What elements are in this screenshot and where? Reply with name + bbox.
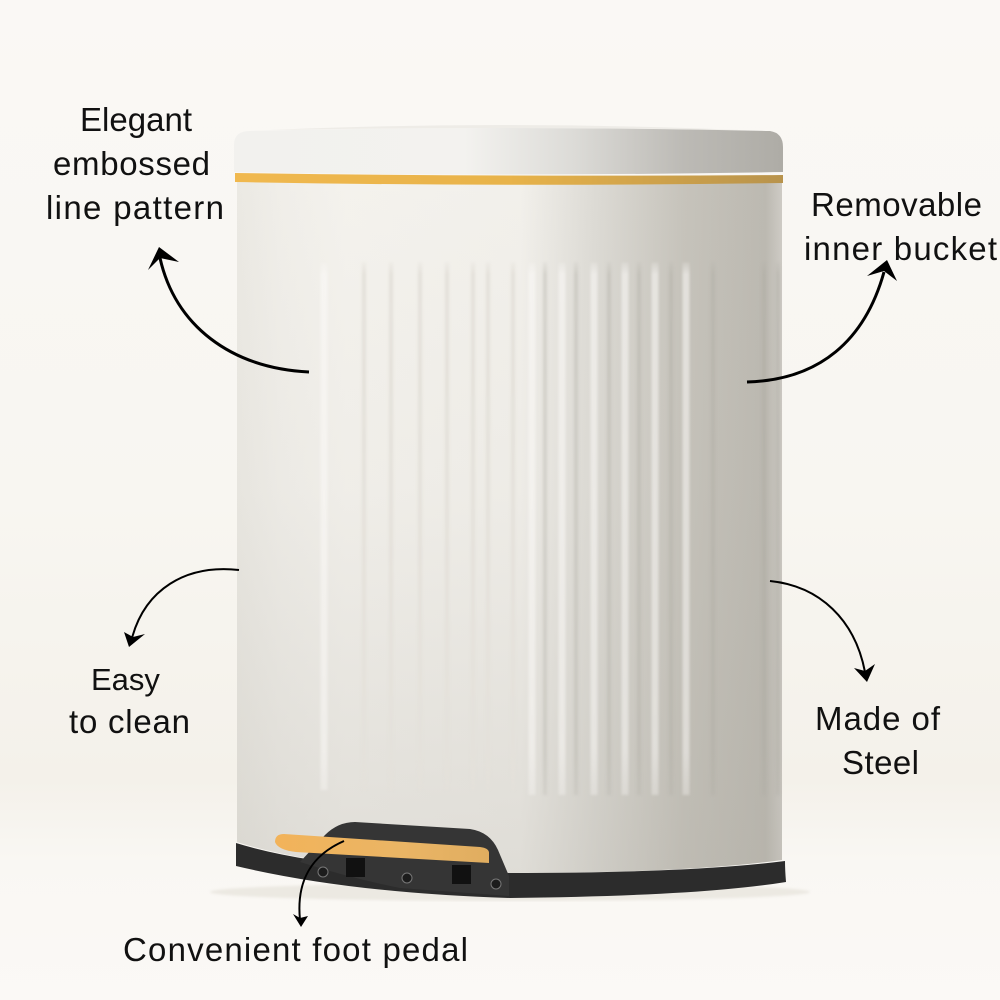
floor shadow <box>210 883 810 901</box>
callout: Made of Steel: Made of <box>815 700 941 737</box>
callout: Easy to clean: to clean <box>69 703 190 740</box>
gold band <box>235 173 783 185</box>
body vertical shading <box>237 180 782 873</box>
callout: Convenient foot pedal <box>123 841 468 968</box>
bin body <box>237 180 782 873</box>
callout: Removable inner bucket <box>747 186 997 382</box>
pedal housing <box>300 822 509 896</box>
callout: Elegant embossed line pattern: embossed <box>53 145 210 182</box>
callout: Removable inner bucket: inner bucket <box>804 230 997 267</box>
callout: Easy to clean: Easy <box>91 662 160 697</box>
lid top highlight <box>270 125 740 130</box>
callout: Made of Steel: Steel <box>842 744 919 781</box>
callout: Removable inner bucket: Removable <box>811 186 982 223</box>
lid <box>234 128 783 174</box>
pedal screws <box>318 867 501 889</box>
callout: Elegant embossed line pattern: line pattern <box>46 189 224 226</box>
callout: Convenient foot pedal: Convenient foot pedal <box>123 931 468 968</box>
embossed line pattern <box>324 262 778 795</box>
pedal slots <box>346 858 471 884</box>
callout: Made of Steel <box>770 581 941 781</box>
callout: Elegant embossed line pattern <box>46 101 309 372</box>
callout: Easy to clean <box>69 569 239 740</box>
black base <box>236 843 786 898</box>
product: pedal trash bin <box>234 125 786 898</box>
callout: Elegant embossed line pattern: Elegant <box>80 101 192 138</box>
gold foot pedal <box>275 834 489 863</box>
